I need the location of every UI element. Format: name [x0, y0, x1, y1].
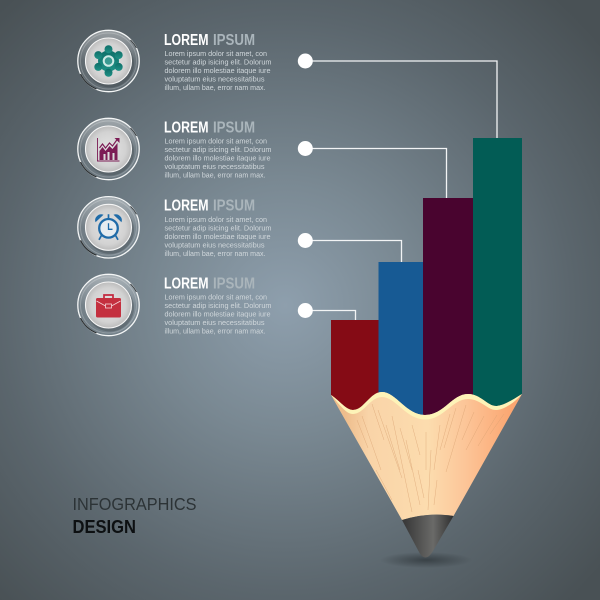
- text block: voluptatum eius necessitatibus: [164, 318, 265, 327]
- panel: briefcase item: [78, 274, 272, 336]
- text block: voluptatum eius necessitatibus: [164, 162, 265, 171]
- title: [72, 494, 197, 537]
- icon: alarm clock badge: [78, 197, 139, 258]
- text block: dolorem illo molestiae itaque iure: [164, 154, 270, 163]
- text block: Lorem ipsum dolor sit amet, con: [164, 137, 267, 146]
- pencil shadow: [380, 552, 472, 568]
- heading: LOREM: [164, 32, 208, 49]
- text block: sectetur adip isicing elit. Dolorum: [164, 224, 272, 232]
- text block: voluptatum eius necessitatibus: [164, 75, 265, 84]
- pencil bar chart: [331, 138, 522, 420]
- heading: IPSUM: [213, 276, 255, 292]
- text block: Lorem ipsum dolor sit amet, con: [164, 215, 267, 224]
- text block: voluptatum eius necessitatibus: [164, 240, 265, 250]
- pencil lead tip: [402, 515, 454, 558]
- heading: LOREM: [164, 120, 208, 136]
- panel: clock item: [78, 197, 272, 258]
- text block: sectetur adip isicing elit. Dolorum: [164, 58, 272, 67]
- connector lines with dots: [298, 54, 497, 320]
- text block: sectetur adip isicing elit. Dolorum: [164, 145, 272, 154]
- heading: LOREM: [164, 198, 208, 214]
- heading: [164, 198, 255, 214]
- icon: briefcase badge: [78, 274, 139, 336]
- text block: dolorem illo molestiae itaque iure: [164, 310, 270, 319]
- text block: sectetur adip isicing elit. Dolorum: [164, 301, 272, 310]
- text block: illum, ullam bae, error nam max.: [164, 249, 266, 258]
- text block: Lorem ipsum dolor sit amet, con: [164, 49, 267, 58]
- text block: illum, ullam bae, error nam max.: [164, 83, 266, 92]
- title: DESIGN: [72, 517, 136, 537]
- panel: chart item: [78, 118, 272, 180]
- heading: LOREM: [164, 276, 208, 292]
- pencil wood body: [331, 392, 522, 520]
- title: INFOGRAPHICS: [72, 494, 197, 514]
- text block: dolorem illo molestiae itaque iure: [164, 232, 270, 241]
- cream shaved edge: [331, 392, 522, 420]
- text block: illum, ullam bae, error nam max.: [164, 327, 266, 336]
- icon: gear badge: [78, 30, 139, 92]
- heading: IPSUM: [213, 120, 255, 136]
- heading: [164, 32, 255, 49]
- heading: [164, 120, 255, 136]
- panel: settings item: [78, 30, 272, 92]
- text block: illum, ullam bae, error nam max.: [164, 171, 266, 180]
- text block: Lorem ipsum dolor sit amet, con: [164, 293, 267, 302]
- text block: dolorem illo molestiae itaque iure: [164, 66, 270, 75]
- icon: growth chart badge: [78, 118, 139, 180]
- heading: [164, 276, 255, 292]
- heading: IPSUM: [213, 32, 255, 49]
- heading: IPSUM: [213, 198, 255, 214]
